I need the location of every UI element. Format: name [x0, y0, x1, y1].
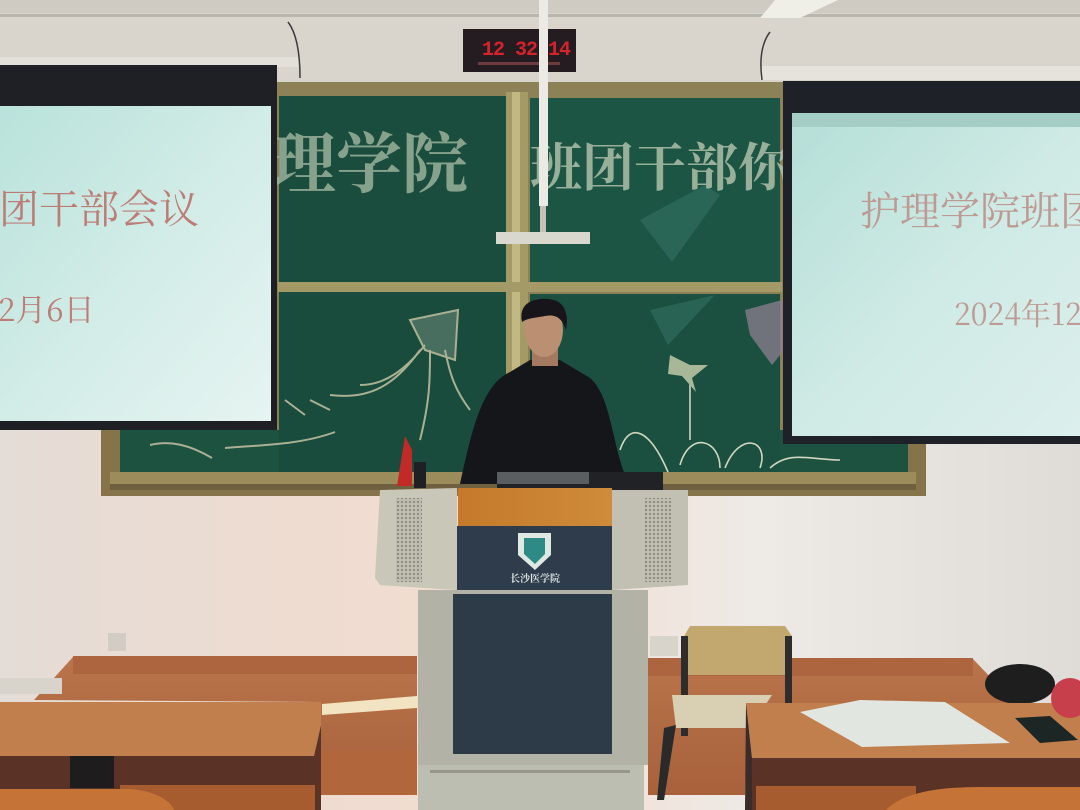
chalk drawing: squid kite: [150, 310, 470, 458]
red ball: [1051, 678, 1080, 718]
trash bin: [985, 664, 1055, 704]
chalkboard: 班团干部你: [530, 126, 794, 201]
left projection screen: 2月6日: [0, 285, 95, 330]
desk front right: [745, 703, 1080, 810]
chalkboard: [101, 82, 926, 496]
hanging projector pole: [496, 0, 590, 244]
laptop on podium: [497, 472, 663, 490]
speaker: [460, 299, 624, 484]
chair on right: [657, 626, 792, 800]
side tables behind podium: [0, 656, 1015, 795]
left projection screen: [0, 65, 277, 430]
school emblem: [518, 533, 551, 570]
wall sockets: [108, 633, 678, 656]
open notebook on desk: [800, 700, 1010, 747]
right projection screen: 2024年12: [954, 290, 1080, 334]
phone on desk: [1015, 716, 1078, 743]
school name: 长沙医学院: [510, 570, 560, 585]
desk front left: [0, 702, 321, 810]
flag and microphone: [397, 436, 426, 488]
digital clock: [463, 29, 576, 72]
digital clock: 12 32 14: [482, 39, 571, 62]
chalk drawing: pinwheel and flowers: [620, 380, 840, 472]
slide text: 团干部会议: [0, 178, 199, 235]
lectern: [375, 488, 688, 810]
chalk title: 理学院: [270, 111, 468, 206]
right projection screen: [783, 81, 1080, 444]
